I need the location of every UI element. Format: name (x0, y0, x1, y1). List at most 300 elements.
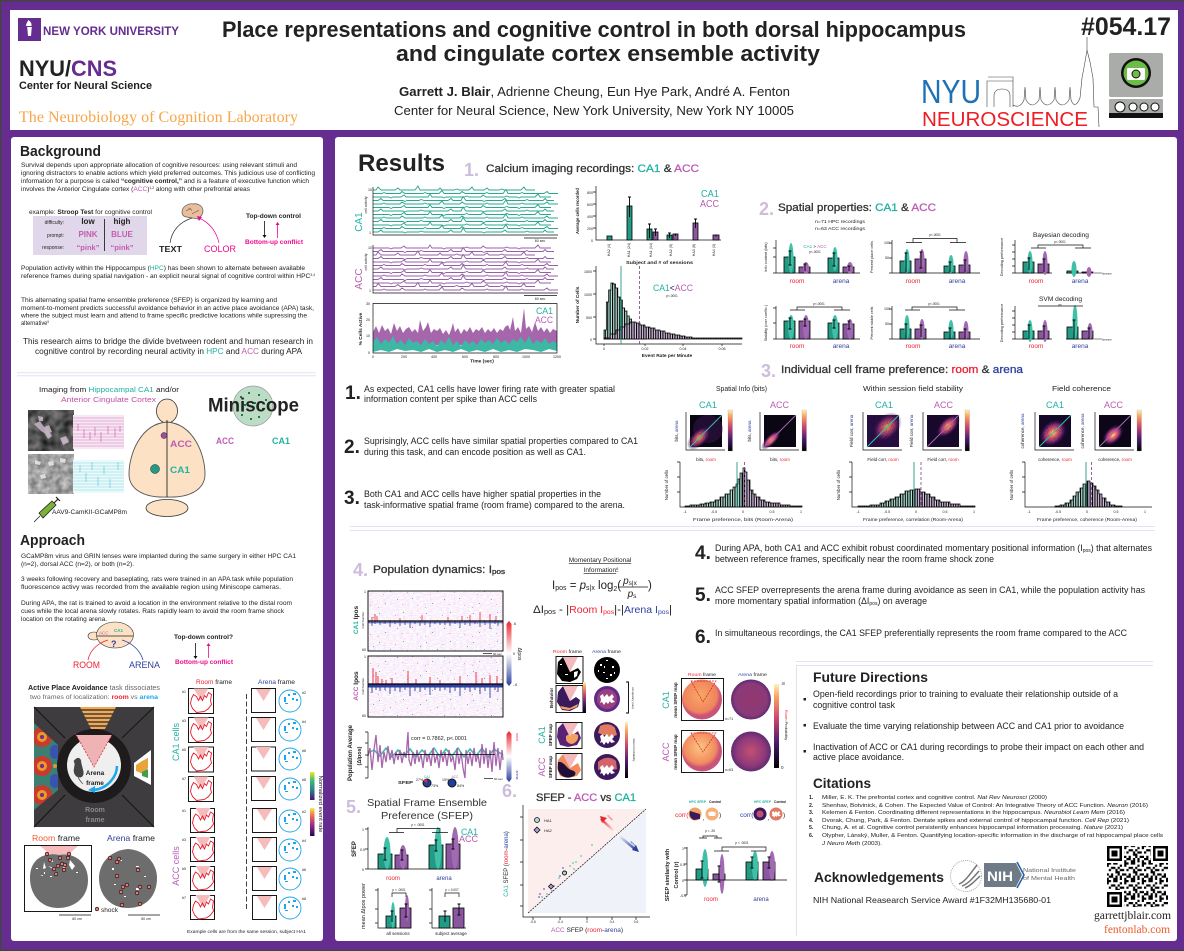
histogram: stability frame preference: 0 (915, 510, 917, 514)
logo: NYU Neuroscience skyline: NEUROSCIENCE (922, 109, 1088, 131)
heading: section 2 (759, 199, 936, 219)
chart: average cells recorded: 400 (587, 215, 593, 219)
figure: Stroop test table: example: Stroop Test for cognitive control (29, 210, 152, 216)
title (222, 17, 966, 66)
chart: population average delta Ipos: (ΔIpos) (357, 746, 363, 765)
takeaway 4: ) that alternates (1091, 543, 1153, 553)
chart: event rate histogram: CA1<ACC (653, 283, 693, 294)
chart: average cells recorded: CA1 (701, 189, 719, 200)
formula: momentary positional information: 2 (613, 586, 617, 593)
icon: Miniscope: Miniscope (208, 396, 299, 416)
icon: brain with TEXT and COLOR pathways: COLOR (204, 244, 236, 254)
chart: population average delta Ipos (348, 724, 519, 782)
logo: NIH NIMH: NIH (987, 868, 1013, 884)
histogram: SI frame preference: Number of cells (664, 469, 669, 500)
chart: percent cells active: 1200 (553, 355, 561, 359)
text: website links: fentonlab.com (1104, 924, 1170, 936)
heatmap: ACC Ipos raster (353, 655, 503, 718)
divider: frame separator dashes (246, 694, 248, 910)
heatmap: SI ACC: bits, room (770, 457, 790, 462)
takeaway 5: more momentary spatial information (ΔI (715, 596, 869, 606)
labels: room and arena axis labels: arena (1072, 343, 1089, 350)
histogram: coherence frame preference: 0.5 (1114, 510, 1118, 514)
chart: CA1 example cells: #1 (182, 690, 186, 694)
chart: event rate histogram (575, 266, 742, 359)
chart group: field coherence: ACC (1104, 400, 1123, 411)
legend: delta Ipos colorbar: .6 (513, 622, 516, 626)
heatmap: stability ACC: Field corr, room (927, 457, 959, 462)
chart: Bayesian decoding: Decoding performance (1000, 238, 1004, 276)
chart: room frame trajectory (24, 846, 92, 912)
chart: ACC example cells: #7 (182, 896, 186, 900)
icon: CC photo badge (1109, 53, 1163, 118)
chart: population average delta Ipos: 60 sec (494, 777, 503, 781)
heading: section 1: 1. (464, 160, 479, 180)
figure: Stroop test table: difficulty: (45, 220, 64, 226)
formula: momentary positional information: I (552, 580, 555, 592)
histogram: coherence frame preference: Number of cells (1009, 469, 1014, 500)
chart: average cells recorded: 200 (587, 227, 593, 231)
chart: CA1 example cells: #3 (182, 719, 186, 723)
title: Place representations and cognitive control in both dorsal hippocampus (222, 17, 966, 42)
formula: momentary positional information: ΔI (533, 604, 543, 616)
figure: CA1 micrograph and traces (28, 454, 124, 494)
formula: momentary positional information: s (633, 593, 637, 600)
heading: section 3: 3. (761, 361, 776, 381)
illustration: place avoidance room (34, 707, 154, 827)
chart: average cells recorded: HA4 (3) (712, 244, 716, 256)
chart: population average delta Ipos: corr = 0.7862, p<.0001 (411, 736, 467, 742)
heatmap: CA1 Ipos raster: Cell Number (361, 612, 365, 628)
chart group: within session field stability: ACC (934, 400, 953, 411)
diagram: small brain with ROOM and ARENA inputs: ACC (99, 630, 109, 636)
histogram: SI frame preference: 0 (742, 510, 744, 514)
chart group: within session field stability (836, 384, 975, 523)
formula: momentary positional information: pos (603, 609, 615, 616)
chart: info content (764, 240, 860, 274)
authors and affiliation (394, 84, 794, 118)
heading: Acknowledgements: Acknowledgements (814, 869, 944, 885)
heading: Active Place Avoidance: two frames of localization: room vs arena (30, 694, 158, 701)
text block: background intro (21, 162, 315, 193)
chart: SFEP similarity bars: 1 (682, 847, 684, 851)
formula: momentary positional information: p (628, 589, 633, 600)
heatmap: SI CA1: bits, arena (674, 420, 679, 442)
text block: background intro: involves the Anterior Cingulate cortex (ACC) (21, 186, 149, 193)
chart: SFEP scatter ACC vs CA1: 0.6 (634, 920, 638, 924)
labels: room and arena axis labels: room (1029, 278, 1043, 285)
text block: citation list: 2. (809, 803, 814, 809)
chart: SFEP bars: SFEP (352, 841, 358, 857)
text block: approach: location on the rotating arena. (21, 616, 107, 623)
formula: momentary positional information: s|x (629, 580, 638, 587)
chart: average cells recorded: HA3 (8) (692, 244, 696, 256)
logo: NIH NIMH: National Institute (1023, 868, 1076, 874)
histogram: SI frame preference: Frame preference, bits (Room-Arena) (693, 517, 793, 523)
logo: NYU Neuroscience skyline (921, 37, 1099, 131)
labels: ACC and CA1: CA1 (272, 436, 290, 446)
chart: average cells recorded (575, 186, 721, 266)
chart: CA1 example cells: #6 (302, 749, 306, 753)
diagram: top-down vs bottom-up (245, 213, 304, 246)
diagram: top-down vs bottom-up: Bottom-up conflict (245, 239, 304, 246)
chart: average cells recorded: HA1 (24) (627, 243, 631, 257)
illustration: place avoidance room: Room (85, 807, 105, 814)
formula: momentary positional information: |-| (614, 604, 624, 616)
heatmap: coherence ACC: coherence, arena (1080, 413, 1085, 449)
takeaway 3: 3. (344, 488, 360, 509)
chart: mean SFEP maps: Arena frame (738, 672, 768, 677)
diagram: corr of SFEP and control maps: corr( (675, 812, 689, 819)
diagram: corr of SFEP and control maps: ) (719, 812, 721, 819)
formula: momentary positional information: s|x (586, 585, 595, 592)
heading: section 5 (346, 797, 487, 822)
chart: ACC example cells: #8 (302, 897, 306, 901)
histogram: coherence frame preference: -1 (1027, 510, 1031, 514)
takeaway 4: between reference frames, specifically near the room frame shock zone (715, 554, 994, 564)
illustration: place avoidance room: frame (85, 817, 105, 824)
chart: CA1 example cells: #8 (302, 778, 306, 782)
figure: Stroop test table: high (114, 217, 131, 226)
chart: behavior and SFEP example maps: Arena frame (592, 649, 622, 654)
authors and affiliation: Center for Neural Science, New York University, New York NY 10005 (394, 103, 794, 118)
labels: room and arena axis labels (790, 278, 1089, 350)
icon: brain with TEXT and COLOR pathways: TEXT (159, 244, 183, 254)
text block: citation list: 4. (809, 818, 814, 824)
takeaway 1: information content per spike than ACC cells (364, 394, 538, 404)
text block: approach: GCaMP8m virus and GRIN lenses were implanted during the same surgery in either HPC CA1 (21, 553, 296, 560)
text block: background intro: 1,2 (149, 186, 154, 190)
chart: SVM decoding: SVM decoding (1039, 296, 1082, 303)
logo: NYU/CNS: Center for Neural Science (19, 80, 152, 92)
chart: Bayesian decoding: chance (1102, 272, 1112, 276)
chart: percent place cells: p<.0001 (929, 233, 941, 237)
diagram: corr of SFEP and control maps: ) (783, 812, 785, 819)
formula: momentary positional information (533, 557, 672, 616)
chart: percent place cells: Percent place cells (870, 241, 874, 273)
takeaway 3 (344, 488, 625, 510)
text: website links: garrettjblair.com (1094, 910, 1171, 922)
formula: momentary positional information: pos (555, 585, 567, 592)
diagram: corr of SFEP and control maps: Control (709, 800, 721, 804)
diagram: corr of SFEP and control maps: HPC SFEP (754, 800, 772, 804)
chart: behavior and SFEP example maps: CA1 (537, 726, 547, 744)
formula: momentary positional information: Room I (569, 605, 603, 616)
chart: SFEP scatter ACC vs CA1 (504, 805, 650, 934)
logo: NYU/CNS (19, 56, 152, 92)
takeaway 2 (344, 436, 638, 458)
heading: section 4 (353, 560, 505, 580)
chart group: field coherence (1009, 384, 1152, 523)
chart: mean SFEP maps: mean SFEP map (673, 682, 678, 718)
note: recording counts (815, 219, 866, 231)
chart group: field coherence: Field coherence (1052, 384, 1111, 393)
chart: ACC example cells: #1 (182, 809, 186, 813)
text block: SFEP (20, 297, 314, 327)
chart: ACC example cells: #5 (182, 867, 186, 871)
chart: SVM decoding: Decoding performance (1000, 304, 1004, 342)
labels: room and arena axis labels: room (906, 278, 920, 285)
note: recording counts: n=63 ACC recordings (815, 226, 866, 231)
figure: Stroop test table: “pink” (77, 243, 100, 252)
chart: SFEP bars: CA1 (461, 827, 478, 837)
lab name: The Neurobiology of Cognition Laboratory (19, 109, 298, 126)
chart: SFEP bars: p < .0001 (411, 823, 425, 827)
chart: percent cells active (358, 302, 561, 364)
figure: Stroop test table: low (81, 217, 95, 226)
text block: citation list: Dvorak, Chung, Park, & Fenton. Dentate spikes and external control of hippocampal function. Cell Rep (2021) (822, 818, 1129, 824)
chart: delta Ipos power bars: subject average (435, 931, 467, 936)
heatmap: CA1 Ipos raster: 60 sec (493, 652, 502, 656)
histogram: coherence frame preference: 1 (1144, 510, 1146, 514)
legend: SFEP donuts: 84% (457, 784, 465, 788)
chart: percent place cells: 50 (885, 256, 889, 260)
text block: citation list: 1. (809, 795, 814, 801)
chart: percent cells active: 0 (372, 355, 374, 359)
chart: SFEP scatter ACC vs CA1: HA2 (544, 828, 553, 833)
text block: approach: During APA, the rat is trained to avoid a location in the environment relative to the distal room (21, 600, 292, 607)
chart: mean SFEP maps: ACC (661, 742, 671, 762)
illustration: place avoidance room: Arena (86, 770, 105, 777)
chart: mean SFEP maps: n=63 (725, 768, 733, 772)
takeaway 5: pos (869, 601, 878, 607)
takeaway 4: 4. (695, 543, 711, 564)
heading: section 4: 4. (353, 560, 368, 580)
text block: future direction bullets: Open-field recordings prior to training to evaluate their relationship outside of a (813, 689, 1118, 699)
chart: SFEP scatter ACC vs CA1: HA1 (544, 818, 553, 823)
text block: population activity: Population activity within the Hippocampus (HPC) has been shown to alternate between available (21, 265, 305, 272)
legend: normalized event rate colorbars: Normalized event rate (317, 776, 323, 832)
chart: mean SFEP maps: CA1 (661, 691, 671, 709)
chart: average cells recorded: Average cells recorded (575, 188, 580, 234)
chart: percent cells active: Time (sec) (470, 358, 494, 364)
heading: Room and Arena frame maps (32, 833, 155, 843)
chart: SFEP bars: 1 (362, 828, 364, 832)
chart group: spatial info preference: CA1 (699, 400, 717, 411)
heatmap: SI ACC: bits, arena (747, 420, 752, 442)
chart group: field coherence: CA1 (1046, 400, 1064, 411)
chart: SFEP scatter ACC vs CA1: ACC SFEP ( room-arena) (551, 928, 623, 934)
chart: percent cells active: 20 (366, 318, 370, 322)
chart: delta Ipos power bars: p < .0001 (392, 888, 406, 892)
chart: SFEP similarity bars: 0.5 (680, 863, 685, 867)
text block: citation list (809, 795, 1163, 847)
icon: rat brain with implant sites (129, 399, 205, 516)
chart: SFEP similarity bars: Control (r) (674, 861, 680, 888)
chart: ACC example cells: #4 (302, 839, 306, 843)
text block: future direction bullets: Inactivation of ACC or CA1 during recordings to probe their impact on each other and (813, 742, 1144, 752)
chart: average cells recorded: 0 (591, 239, 593, 243)
chart: event rate histogram: 1000 (584, 293, 592, 297)
histogram: SI frame preference: 0.5 (770, 510, 774, 514)
heading: section 4: Population dynamics: I (373, 564, 484, 576)
formula: momentary positional information: Arena I (624, 605, 658, 616)
text block: approach (21, 553, 296, 623)
figure: imaging heading (39, 385, 179, 404)
legend: shock and scale bars: 60 cm (72, 917, 82, 921)
formula: momentary positional information: = (566, 580, 580, 592)
chart: ACC calcium traces: 1 (369, 289, 371, 293)
chart: SFEP scatter ACC vs CA1: 0.4 (610, 920, 614, 924)
text block: background intro: along with other prefrontal areas (154, 186, 251, 193)
chart: average cells recorded: Subject and # of sessions (626, 260, 693, 266)
text block: approach: cues while the local arena slowly rotates. Rats rapidly learn to avoid the room frame shock (21, 608, 285, 615)
title: and cingulate cortex ensemble activity (396, 41, 821, 66)
figure: imaging heading: Imaging from Hippocampal CA1 and/or (39, 385, 179, 394)
text block: SFEP: where the subject must learn and attend to frame specific predictive locations while supressing the (20, 312, 307, 320)
chart: population average delta Ipos: room (515, 733, 519, 741)
takeaway 4 (695, 543, 1153, 564)
legend: delta Ipos colorbar: -.6 (513, 683, 517, 687)
text block: citation list: J Neuro Meth (2003). (821, 841, 883, 847)
legend: shock and scale bars: shock (101, 908, 119, 914)
labels: room and arena axis labels: arena (1072, 278, 1089, 285)
icon: rat brain with implant sites: ACC (170, 439, 192, 450)
heading: Active Place Avoidance: Active Place Avoidance task dissociates (28, 685, 160, 692)
chart: info content: p<.0001 (809, 250, 821, 254)
heading: section 1 (464, 160, 699, 180)
heading: section 5: Spatial Frame Ensemble (367, 797, 487, 809)
diagram: corr of SFEP and control maps: HPC SFEP (689, 800, 707, 804)
heading: Background: Background (20, 144, 101, 160)
logo: NIH NIMH: of Mental Health (1023, 876, 1075, 882)
illustration: place avoidance room: frame (86, 780, 104, 787)
chart: SFEP scatter ACC vs CA1: -0.6 (530, 920, 536, 924)
chart: CA1 example cells (171, 688, 306, 802)
chart: average cells recorded: 800 (587, 191, 593, 195)
heading: Room and Arena frame maps: Room frame (32, 833, 80, 843)
text block: population activity: 3,4 (310, 273, 315, 277)
figure: imaging heading: Anterior Cingulate Cortex (61, 395, 156, 404)
chart: info content: Info content (bits) (764, 242, 768, 272)
chart: SFEP similarity bars: p = .26 (705, 829, 715, 833)
icon: brain with TEXT and COLOR pathways (159, 204, 236, 254)
labels: room and arena axis labels: room (1029, 343, 1043, 350)
chart: average cells recorded: 600 (587, 203, 593, 207)
text block: approach: fluorescence activy was recorded from the available region using Miniscope cameras. (21, 584, 281, 591)
text block: citation list: 6. (809, 833, 814, 839)
legend: shock and scale bars (59, 907, 160, 921)
chart: population average delta Ipos: arena (515, 771, 519, 780)
chart: percent cells active: 30 (366, 302, 370, 306)
legend: SFEP donuts: 73% (431, 784, 439, 788)
chart: event rate histogram: 0.04 (680, 347, 686, 351)
chart: percent cells active: 400 (431, 355, 437, 359)
chart: arena frame trajectory (99, 849, 157, 908)
chart: behavior and SFEP example maps: Room Probability (632, 739, 636, 762)
text block: future direction bullets (804, 689, 1144, 762)
chart: delta Ipos power bars: all sessions (386, 931, 410, 936)
takeaway 2: 2. (344, 437, 360, 458)
labels: room and arena axis labels: room (906, 343, 920, 350)
chart group: spatial info preference (664, 384, 806, 523)
chart: stability: p<.0001 (813, 302, 825, 306)
text block: future direction bullets: cognitive control task (813, 700, 896, 710)
chart group: spatial info preference: ACC (770, 400, 789, 411)
chart: ACC example cells (171, 808, 306, 920)
legend: delta Ipos colorbar (506, 621, 522, 687)
chart: SFEP similarity bars: arena (753, 897, 769, 903)
heatmap: ACC Ipos raster: 60 (362, 714, 366, 718)
formula: momentary positional information: p (623, 576, 629, 587)
text block: background intro: Survival depends upon appropriate allocation of cognitive resources: using relevant stimuli and (21, 162, 297, 169)
chart: event rate histogram: 0 (603, 347, 605, 351)
chart: percent cells active: % Cells Active (358, 312, 364, 345)
legend: SFEP donuts (398, 775, 465, 788)
chart: CA1 example cells: #2 (302, 691, 306, 695)
chart: SFEP bars: 0 (362, 868, 364, 872)
chart: event rate histogram: 0.02 (642, 347, 648, 351)
chart: delta Ipos power bars: mean ΔIpos power (361, 883, 367, 929)
chart: SVM decoding: chance (1102, 338, 1112, 342)
heatmap: SI ACC (747, 410, 806, 462)
chart: CA1 calcium traces: 10 (368, 188, 372, 192)
chart: ACC example cells: #3 (182, 838, 186, 842)
chart: percent stable cells: Percent stable cells (870, 306, 874, 339)
histogram: coherence frame preference: -0.5 (1055, 510, 1061, 514)
logo: NYU/CNS: NYU/CNS (19, 56, 117, 81)
formula: momentary positional information: Information (584, 567, 616, 574)
heading: section 1: Calcium imaging recordings: CA1 & ACC (486, 163, 699, 175)
chart: percent cells active: 1000 (522, 355, 530, 359)
chart: average cells recorded: HA1 (14) (649, 243, 653, 257)
chart: SFEP similarity bars: room (704, 897, 718, 903)
text block: SFEP: This alternating spatial frame ensemble preference (SFEP) is organized by learning and (21, 297, 277, 304)
legend: SFEP donuts: CA1 (424, 775, 430, 779)
legend: delta Ipos colorbar: 0 (513, 652, 515, 656)
heatmap: ACC Ipos raster: 1 (364, 655, 366, 659)
heading: section 2: Spatial properties: CA1 & ACC (778, 202, 936, 214)
chart: behavior and SFEP example maps: ACC (537, 757, 547, 777)
chart: mean SFEP maps (661, 672, 789, 772)
text block: research aim: cognitive control by recording neural activity in HPC and ACC during APA (35, 347, 303, 356)
histogram: stability frame preference: 1 (973, 510, 975, 514)
chart: event rate histogram: Number of Cells (575, 286, 581, 323)
takeaway 3: task-informative spatial frame (room frame) compared to the arena. (364, 500, 625, 510)
chart: average cells recorded: HA2 (4) (607, 244, 611, 256)
chart: percent stable cells (870, 302, 980, 339)
figure: Stroop test table: response: (42, 245, 64, 251)
takeaway 1: As expected, CA1 cells have lower firing rate with greater spatial (364, 384, 615, 394)
chart: percent place cells (870, 233, 980, 273)
chart: SFEP similarity bars: SFEP similarity with (665, 848, 671, 901)
chart: SFEP bars (352, 823, 478, 882)
text block: approach: (n=2), dorsal ACC (n=2), or both (n=2). (21, 561, 134, 568)
formula: momentary positional information: Momentary Positional (569, 557, 632, 564)
formula: momentary positional information: pos (544, 609, 556, 616)
diagram: small brain with ROOM and ARENA inputs: ? (111, 639, 116, 649)
chart: example cell maps headings: Arena frame (258, 680, 296, 686)
chart: CA1 example cells: CA1 cells (171, 722, 181, 761)
heading: section 2: 2. (759, 199, 774, 219)
icon: QR code (1107, 846, 1168, 907)
text: NIH award: NIH National Reasearch Service Award #1F32MH135680-01 (813, 895, 1051, 905)
heading: section 3: Individual cell frame preference: room & arena (781, 364, 1024, 376)
heading: section 5: Preference (SFEP) (381, 810, 473, 822)
chart: SFEP scatter ACC vs CA1: -0.4 (557, 920, 563, 924)
chart: behavior and SFEP example maps: SFEP map (548, 724, 553, 746)
legend: SFEP donuts: SFEP (398, 780, 414, 786)
chart: mean SFEP maps: n=71 (725, 717, 733, 721)
formula: momentary positional information: pos (658, 609, 670, 616)
histogram: coherence frame preference: 0 (1086, 510, 1088, 514)
heading: section 4: pos (492, 567, 505, 576)
chart: percent cells active: 0 (368, 351, 370, 355)
takeaway 5: ) on average (877, 596, 927, 606)
heading: section 6 (502, 781, 636, 804)
chart: SFEP bars: ACC (459, 834, 478, 844)
chart: percent cells active: 600 (462, 355, 468, 359)
